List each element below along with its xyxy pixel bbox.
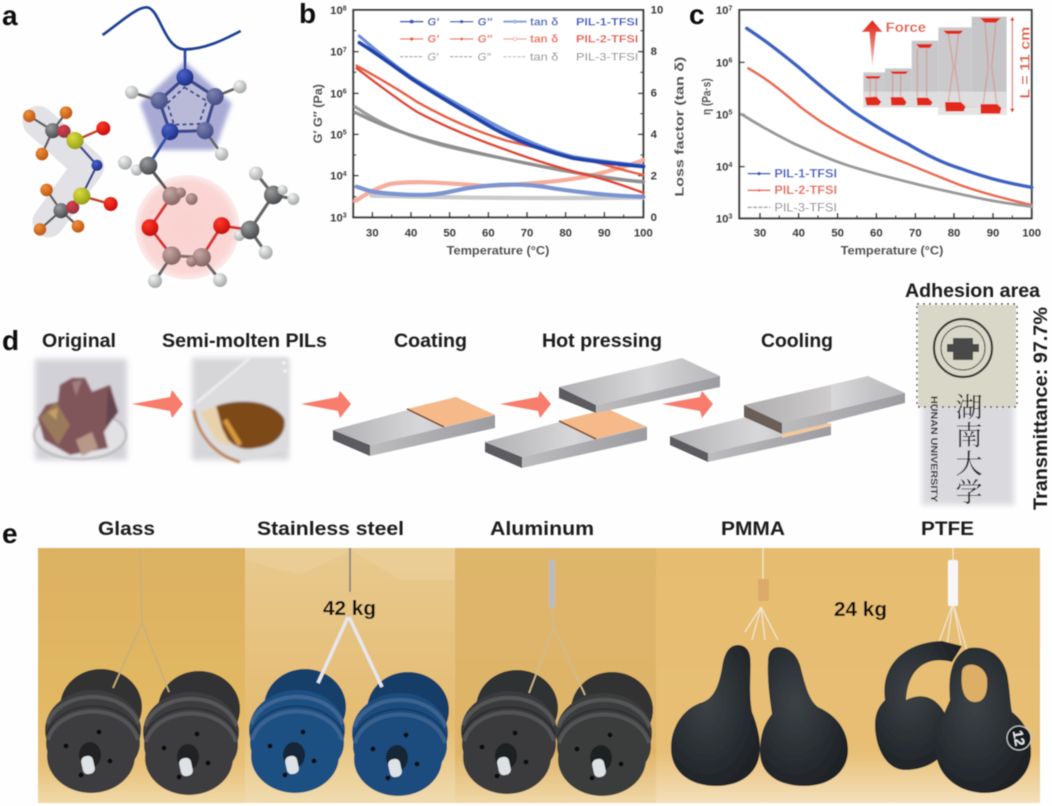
panel e: load tests (2, 518, 1040, 803)
kettlebell pair (671, 645, 848, 786)
y axis tick labels: 7 (728, 5, 732, 12)
y axis tick labels: 4 (728, 162, 732, 169)
x axis title: Temperature (°C) (447, 244, 549, 258)
dumbbell pair (249, 669, 346, 793)
rope (349, 548, 351, 592)
process labels: Semi-molten PILs (162, 330, 327, 352)
dotted adhesion outline (917, 304, 1017, 407)
legend: G′ (427, 51, 439, 63)
left axis title: G′ G″ (Pa) (311, 84, 325, 143)
left axis labels (330, 5, 347, 224)
photo: original PIL flakes (34, 359, 127, 460)
left axis labels: 10 (330, 129, 343, 141)
back kettlebell (875, 641, 962, 770)
photo: PMMA (656, 548, 865, 803)
left axis labels: 3 (343, 213, 347, 220)
inset: stretching photos (863, 17, 1007, 115)
right axis labels (651, 5, 663, 224)
material labels: PMMA (721, 518, 785, 540)
ether side chain highlight (135, 175, 240, 280)
right axis labels: 4 (651, 129, 658, 141)
cation: imidazolium ring (125, 50, 247, 161)
process labels: Cooling (761, 330, 833, 352)
adhesion area label: Adhesion area (905, 280, 1040, 302)
x axis labels: 90 (598, 228, 611, 240)
x axis tick labels: 100 (1022, 228, 1041, 240)
right axis labels: 0 (651, 212, 657, 224)
y axis tick labels: 10 (716, 5, 728, 17)
arrow 1 (132, 390, 183, 418)
x axis tick labels (754, 228, 1041, 240)
panel c: viscosity chart (689, 0, 1041, 257)
right axis labels: 8 (651, 46, 657, 58)
arrow 4 (662, 391, 713, 418)
legend: PIL-2-TFSI (774, 183, 837, 197)
rope and clamp (745, 548, 778, 640)
material labels: Stainless steel (257, 518, 404, 540)
y axis tick labels: 10 (716, 162, 728, 174)
panel letter d: d (2, 325, 19, 356)
left axis labels: 10 (330, 47, 343, 59)
photo: semi-molten PIL (192, 358, 289, 462)
panel d: process (2, 280, 1052, 510)
legend: G″ (478, 16, 492, 28)
axes frame (353, 10, 643, 217)
y axis tick labels: 5 (728, 110, 732, 117)
front kettlebell (936, 648, 1031, 793)
slab: hot pressing top (559, 358, 720, 413)
panel letter e: e (2, 518, 18, 549)
photo: PTFE (865, 548, 1040, 803)
kettlebell handle opening (962, 665, 987, 702)
legend (748, 166, 837, 214)
axes frame (739, 10, 1032, 218)
university seal (934, 319, 992, 377)
left axis labels: 5 (343, 130, 347, 137)
legend: PIL-3-TFSI (774, 200, 837, 214)
material labels: Glass (98, 518, 155, 540)
material labels: PTFE (921, 518, 974, 540)
y axis tick labels: 10 (716, 213, 728, 225)
rope (113, 550, 169, 692)
x axis tick labels: 90 (987, 228, 999, 240)
x axis labels: 100 (634, 228, 653, 240)
x axis tick labels: 60 (870, 228, 883, 240)
panel a: molecular structure (2, 0, 299, 288)
dumbbell pair (461, 670, 558, 794)
ether side chain atoms (118, 132, 299, 288)
load label 42 kg: 42 kg (323, 597, 376, 620)
photo: glass (38, 548, 245, 803)
slab: coating (333, 397, 495, 456)
rope (529, 606, 585, 695)
dumbbell pair (45, 669, 142, 793)
transmittance label: Transmittance: 97.7% (1030, 307, 1052, 510)
x axis labels (366, 228, 653, 240)
y axis title: η (Pa·s) (700, 78, 714, 115)
y axis tick labels: 10 (716, 57, 728, 69)
panel b: rheology chart (299, 0, 686, 258)
legend: PIL-3-TFSI (576, 51, 638, 63)
photo: aluminum (455, 548, 656, 803)
left axis labels: 10 (330, 5, 343, 17)
legend: G′ (427, 34, 440, 46)
slab: hot pressing bottom (485, 409, 647, 468)
x axis tick labels: 80 (948, 228, 960, 240)
arrow 3 (500, 391, 551, 418)
length label: L = 11 cm (1016, 27, 1032, 99)
viscosity curves (742, 28, 1032, 207)
left axis labels: 8 (343, 5, 347, 12)
modulus curves (355, 36, 643, 193)
x axis title: Temperature (°C) (841, 243, 943, 257)
rope and clamp (938, 548, 971, 664)
weight badge (1007, 726, 1031, 750)
left axis labels: 10 (330, 88, 343, 100)
orange coating layer (407, 397, 495, 427)
left axis labels: 10 (330, 212, 343, 224)
panel letter a: a (2, 0, 18, 31)
y axis tick labels: 3 (728, 214, 732, 221)
arrow 2 (301, 391, 351, 418)
legend: tan δ (530, 51, 558, 63)
photo: stainless steel (245, 548, 455, 803)
force label: Force (886, 19, 926, 35)
load label 24 kg: 24 kg (834, 598, 887, 621)
molecule drawing (23, 7, 299, 288)
right axis labels: 10 (651, 5, 663, 17)
right axis labels: 6 (651, 88, 657, 100)
process labels: Coating (394, 330, 467, 352)
slab: cooling assembly (670, 376, 905, 462)
x axis labels: 30 (366, 228, 379, 240)
legend: G″ (478, 51, 491, 63)
photo: adhesion sample (917, 304, 1017, 505)
y axis tick labels: 6 (728, 58, 732, 65)
left axis labels: 10 (330, 171, 343, 183)
clamp (549, 560, 555, 608)
legend: tan δ (530, 16, 558, 28)
material labels (98, 518, 974, 540)
left axis labels: 4 (343, 171, 347, 178)
length dimension arrow (1010, 17, 1015, 113)
tan delta curves (355, 160, 643, 201)
legend: G′ (427, 16, 440, 28)
legend: G″ (478, 34, 492, 46)
left axis labels: 7 (343, 47, 347, 54)
x axis tick labels: 70 (909, 228, 922, 240)
process labels: Original (42, 330, 116, 352)
x axis labels: 70 (521, 228, 533, 240)
legend: PIL-1-TFSI (774, 166, 837, 180)
x axis tick labels: 50 (831, 228, 844, 240)
legend: PIL-2-TFSI (576, 34, 638, 46)
legend: tan δ (530, 34, 558, 46)
right axis labels: 2 (651, 170, 657, 182)
anion: TFSI (23, 106, 118, 236)
right axis title: Loss factor (tan δ) (672, 57, 686, 197)
x axis labels: 40 (405, 228, 417, 240)
HUNAN UNIVERSITY: HUNAN UNIVERSITY (928, 396, 939, 503)
legend: PIL-1-TFSI (576, 16, 638, 28)
process labels (42, 330, 833, 352)
orange layer (559, 409, 646, 439)
legend (400, 16, 638, 63)
polymer backbone (103, 7, 241, 49)
x axis labels: 60 (482, 228, 495, 240)
weight badge: 12 (1010, 729, 1028, 747)
left axis labels: 6 (343, 89, 347, 96)
x axis tick labels: 40 (792, 228, 805, 240)
material labels: Aluminum (490, 518, 594, 540)
force arrow (862, 20, 883, 67)
x axis labels: 80 (559, 228, 572, 240)
y axis tick labels: 10 (716, 109, 728, 121)
x axis tick labels: 30 (754, 228, 766, 240)
process labels: Hot pressing (542, 330, 662, 352)
Chinese characters: 湖南大学 (950, 393, 988, 505)
y axis tick labels (716, 5, 732, 225)
x axis labels: 50 (443, 228, 456, 240)
